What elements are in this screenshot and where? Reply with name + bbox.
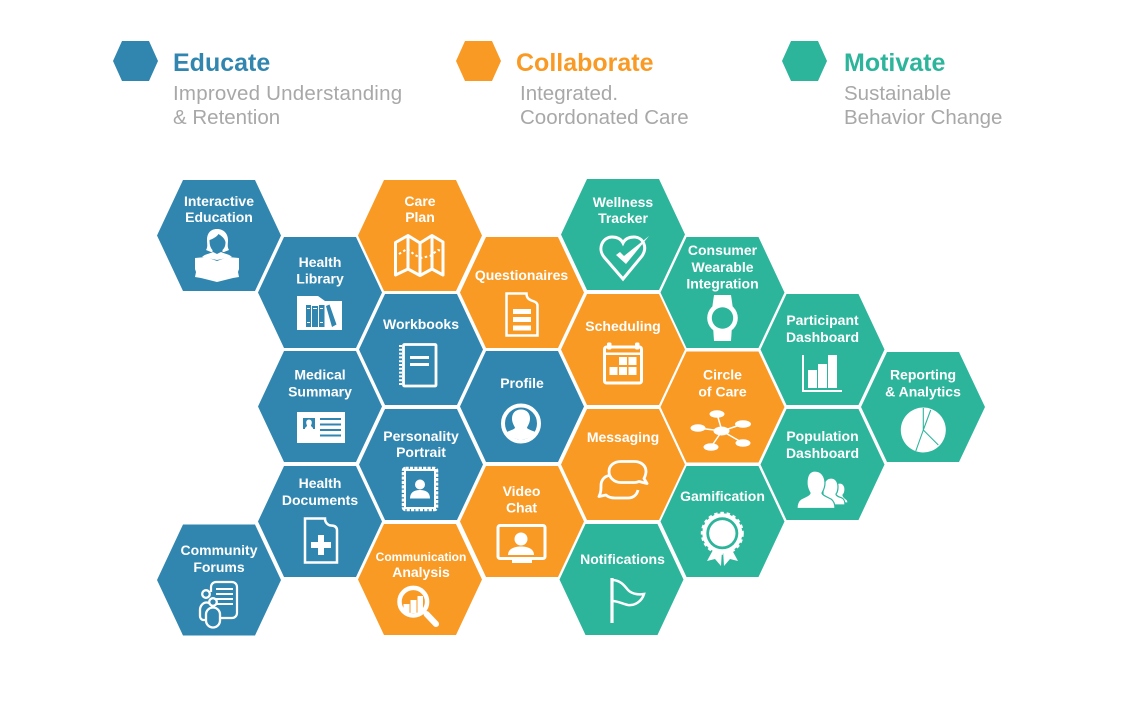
icon: document with plus — [305, 518, 337, 562]
label: population dashboard: Population — [786, 428, 859, 444]
icon: person reading — [195, 229, 239, 282]
label: workbooks: Workbooks — [383, 316, 459, 332]
label: health library: Health — [299, 254, 341, 270]
legend heading: motivate: Motivate — [844, 49, 946, 77]
icon: folded map — [396, 236, 443, 276]
icon: calendar — [604, 342, 642, 383]
panel: messaging — [561, 409, 685, 520]
label: questionaires: Questionaires — [475, 267, 568, 283]
legend: educate — [113, 41, 402, 129]
label: notifications: Notifications — [580, 551, 665, 567]
icon: bar chart — [802, 355, 842, 392]
icon: award rosette — [702, 513, 743, 566]
panel: profile — [460, 351, 584, 462]
label: consumer wearable integration: Integration — [686, 276, 759, 292]
panel: health documents — [258, 466, 382, 577]
label: circle of care: Circle — [703, 366, 742, 382]
label: participant dashboard: Participant — [786, 312, 859, 328]
legend hexagon: collaborate — [456, 41, 501, 81]
label: community forums: Forums — [193, 559, 245, 575]
label: community forums: Community — [180, 542, 258, 558]
icon: id card — [297, 412, 345, 443]
label: health documents: Documents — [282, 492, 358, 508]
panel: workbooks — [359, 294, 483, 405]
icon: spiral notebook — [400, 344, 436, 386]
legend hexagon: motivate — [782, 41, 827, 81]
icon: flag — [612, 578, 644, 623]
legend: motivate — [782, 41, 1002, 129]
label: medical summary: Summary — [288, 384, 352, 400]
icon: care network — [690, 410, 751, 451]
panel: health library — [258, 237, 382, 348]
panel: circle of care — [660, 352, 784, 462]
label: health library: Library — [296, 270, 344, 286]
legend heading: educate: Educate — [173, 49, 270, 77]
label: messaging: Messaging — [587, 429, 659, 445]
panel: population dashboard — [760, 409, 884, 520]
legend text: motivate: Behavior Change — [844, 106, 1002, 129]
panel: participant dashboard — [760, 294, 884, 405]
label: medical summary: Medical — [294, 366, 346, 382]
legend heading: collaborate: Collaborate — [516, 49, 654, 77]
legend: collaborate — [456, 41, 689, 129]
label: circle of care: of Care — [698, 384, 747, 400]
legend hexagon: educate — [113, 41, 158, 81]
label: communication analysis: Communication — [376, 550, 466, 564]
icon: profile avatar — [503, 406, 539, 442]
panel: personality portrait — [359, 409, 483, 520]
legend text: collaborate: Coordonated Care — [520, 106, 689, 129]
panel: consumer wearable integration — [660, 237, 784, 348]
label: consumer wearable integration: Consumer — [688, 242, 758, 258]
label: participant dashboard: Dashboard — [786, 329, 859, 345]
panel: scheduling — [561, 294, 685, 405]
icon: folder of books — [297, 296, 342, 330]
label: video chat: Chat — [506, 500, 537, 516]
label: reporting and analytics: Reporting — [890, 366, 956, 382]
legend text: educate: Improved Understanding — [173, 82, 402, 105]
panel: communication analysis — [358, 524, 482, 635]
label: health documents: Health — [299, 475, 341, 491]
label: interactive education: Education — [185, 209, 253, 225]
icon: smart watch — [707, 295, 738, 341]
icon: pie chart — [901, 408, 946, 452]
icon: chat bubbles — [599, 462, 647, 498]
panel: interactive education — [157, 180, 281, 291]
legend text: motivate: Sustainable — [844, 82, 951, 105]
icon: community forum people — [200, 582, 237, 628]
label: scheduling: Scheduling — [585, 318, 661, 334]
icon: group of people — [797, 471, 848, 508]
label: gamification: Gamification — [680, 488, 765, 504]
label: personality portrait: Portrait — [396, 444, 446, 460]
icon: video monitor — [498, 526, 545, 563]
label: communication analysis: Analysis — [392, 564, 450, 580]
panel: medical summary — [258, 351, 382, 462]
panel: questionaires — [460, 237, 584, 348]
icon: portrait stamp — [404, 468, 436, 510]
label: consumer wearable integration: Wearable — [692, 259, 754, 275]
icon: heart with check — [601, 236, 649, 279]
panel: video chat — [460, 466, 584, 577]
panel: gamification — [660, 466, 784, 577]
icon: magnifier with bars — [400, 588, 436, 624]
label: reporting and analytics: & Analytics — [885, 384, 961, 400]
label: interactive education: Interactive — [184, 193, 254, 209]
panel: notifications — [560, 524, 684, 635]
label: personality portrait: Personality — [383, 428, 459, 444]
legend text: collaborate: Integrated. — [520, 82, 618, 105]
panel: wellness tracker — [561, 179, 685, 290]
label: wellness tracker: Wellness — [593, 194, 653, 210]
legend text: educate: & Retention — [173, 106, 280, 129]
label: video chat: Video — [503, 483, 540, 499]
label: population dashboard: Dashboard — [786, 445, 859, 461]
label: care plan: Plan — [405, 209, 435, 225]
icon: document with lines — [506, 294, 538, 336]
panel: community forums — [157, 524, 281, 636]
label: wellness tracker: Tracker — [598, 210, 648, 226]
panel: care plan — [358, 180, 482, 291]
label: care plan: Care — [404, 193, 436, 209]
panel: reporting and analytics — [861, 352, 985, 462]
label: profile: Profile — [500, 375, 544, 391]
